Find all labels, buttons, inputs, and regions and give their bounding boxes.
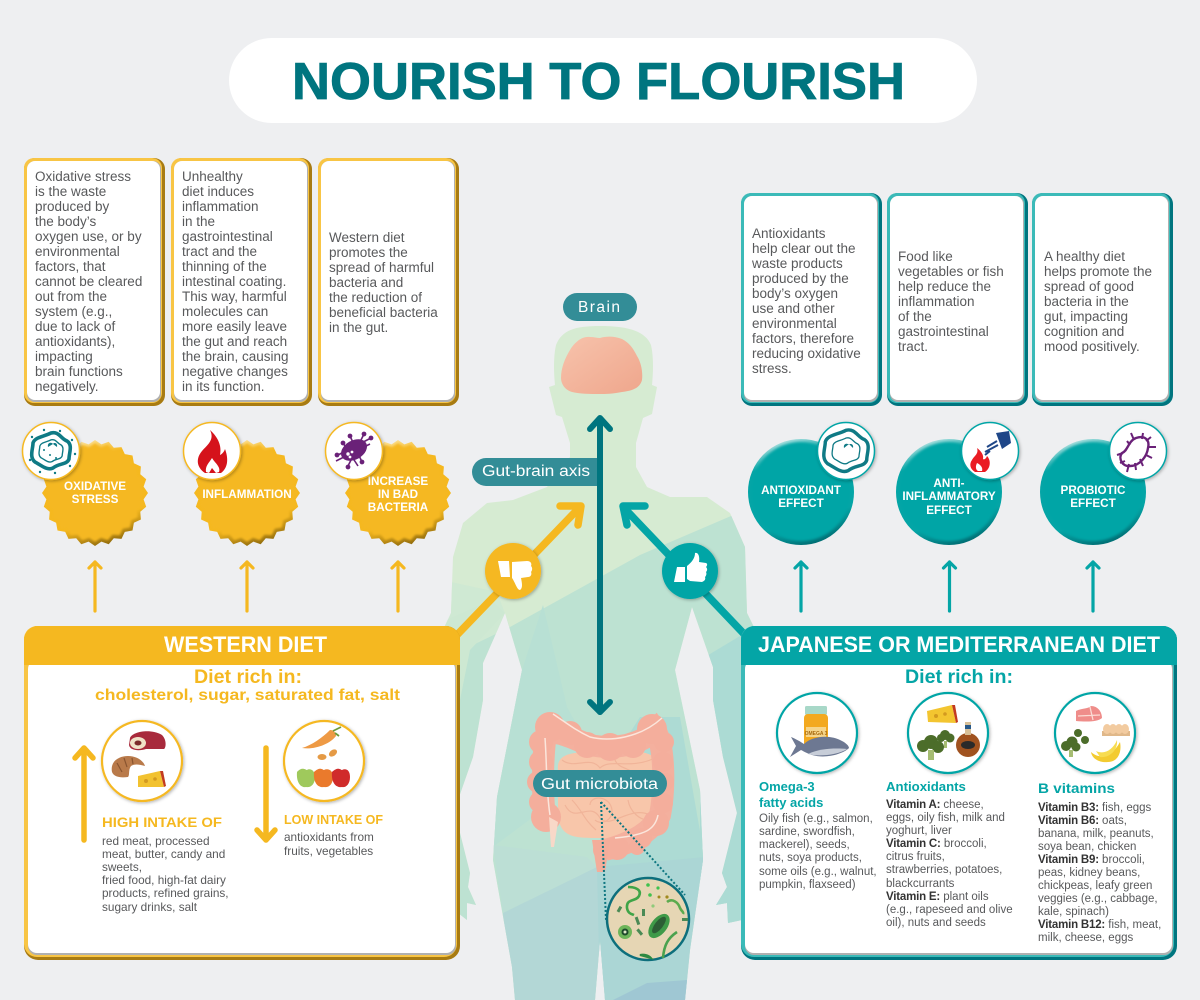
badge: increase in bad bacteria: INCREASE <box>368 475 428 488</box>
card: inflammation text: the gut and reach <box>182 334 287 349</box>
card: inflammation text: in the <box>182 214 215 229</box>
card: inflammation text: intestinal coating. <box>182 274 286 289</box>
column: antioxidants: Antioxidants <box>886 779 966 794</box>
column: antioxidants: cheese, <box>940 799 984 811</box>
card: probiotic text: helps promote the <box>1044 264 1152 279</box>
card: probiotic text: spread of good <box>1044 279 1134 294</box>
heading: japanese or mediterranean diet: JAPANESE OR MEDITERRANEAN DIET <box>758 632 1161 657</box>
subheading: diet rich in: cholesterol, sugar, saturated fat, salt <box>95 687 401 704</box>
subheading: diet rich in: Diet rich in: <box>905 667 1013 688</box>
brain <box>561 337 642 394</box>
column: antioxidants: broccoli, <box>941 838 987 850</box>
card: inflammation text: tract and the <box>182 244 257 259</box>
column: antioxidants: Vitamin C: <box>886 838 941 850</box>
column: antioxidants: blackcurrants <box>886 878 955 890</box>
column: B vitamins: fish, eggs <box>1099 802 1152 814</box>
label: Gut-brain axis: Gut-brain axis <box>482 463 590 480</box>
text: low intake: LOW INTAKE OF <box>284 813 383 827</box>
column: omega-3: Oily fish (e.g., salmon, <box>759 813 873 825</box>
badge: oxidative stress <box>22 422 148 546</box>
label: Gut-brain axis <box>472 458 600 486</box>
card: antioxidants text: produced by the <box>752 271 849 286</box>
column: B vitamins: kale, spinach) <box>1038 906 1109 918</box>
column: B vitamins: banana, milk, peanuts, <box>1038 828 1154 840</box>
column: B vitamins: soya bean, chicken <box>1038 841 1136 853</box>
badge: oxidative stress: OXIDATIVE <box>64 480 126 493</box>
icon: omega-3 <box>777 693 857 773</box>
column: B vitamins: broccoli, <box>1099 854 1145 866</box>
badge: increase in bad bacteria <box>326 422 451 546</box>
arrow: low intake <box>257 748 275 840</box>
badge: anti-inflammatory effect: ANTI- <box>933 477 965 490</box>
badge: anti-inflammatory effect <box>896 422 1018 545</box>
column: B vitamins: Vitamin B9: <box>1038 854 1099 866</box>
card: oxidative stress text: antioxidants), <box>35 334 115 349</box>
label: Gut microbiota: Gut microbiota <box>541 776 658 793</box>
card: anti-inflammatory text: tract. <box>898 339 928 354</box>
column: antioxidants: (e.g., rapeseed and olive <box>886 904 1013 916</box>
column: B vitamins: peas, kidney beans, <box>1038 867 1140 879</box>
panel: western diet <box>24 626 460 960</box>
card: inflammation text: This way, harmful <box>182 289 287 304</box>
card: oxidative stress text <box>24 158 165 406</box>
card: inflammation text: thinning of the <box>182 259 267 274</box>
badge: anti-inflammatory effect: INFLAMMATORY <box>902 490 996 503</box>
human body silhouette <box>445 326 754 1000</box>
card: oxidative stress text: impacting <box>35 349 93 364</box>
icon: water on flame <box>962 422 1018 480</box>
subheading: diet rich in <box>95 667 401 704</box>
column: antioxidants: plant oils <box>940 891 989 903</box>
text: low intake: fruits, vegetables <box>284 844 373 858</box>
card: anti-inflammatory text: Food like <box>898 249 953 264</box>
icon: high intake foods <box>102 721 182 801</box>
card: probiotic text: cognition and <box>1044 324 1124 339</box>
card: oxidative stress text: the body’s <box>35 214 97 229</box>
card: anti-inflammatory text <box>887 193 1028 406</box>
icon: flame <box>184 422 240 480</box>
card: probiotic text <box>1032 193 1173 406</box>
badge: anti-inflammatory effect: EFFECT <box>926 504 973 517</box>
card: anti-inflammatory text: inflammation <box>898 294 975 309</box>
card: antioxidants text: use and other <box>752 301 835 316</box>
subheading: diet rich in: Diet rich in: <box>194 667 302 688</box>
card: bad bacteria text <box>318 158 459 406</box>
badge: probiotic effect: PROBIOTIC <box>1061 484 1126 497</box>
card: bad bacteria text: beneficial bacteria <box>329 305 438 320</box>
text: high intake: red meat, processed <box>102 834 210 848</box>
column: antioxidants: oil), nuts and seeds <box>886 917 986 929</box>
column: omega-3: some oils (e.g., walnut, <box>759 866 877 878</box>
card: inflammation text: in its function. <box>182 379 265 394</box>
card: inflammation text: inflammation <box>182 199 259 214</box>
icon: bad bacterium <box>326 422 382 480</box>
card: bad bacteria text: bacteria and <box>329 275 403 290</box>
column: B vitamins: Vitamin B12: <box>1038 919 1105 931</box>
text: high intake: fried food, high-fat dairy <box>102 873 226 887</box>
column: B vitamins: oats, <box>1099 815 1127 827</box>
card: antioxidants text: reducing oxidative <box>752 346 861 361</box>
card: antioxidants text <box>741 193 882 406</box>
card: oxidative stress text: environmental <box>35 244 120 259</box>
column: omega-3: sardine, swordfish, <box>759 826 855 838</box>
badge: increase in bad bacteria: BACTERIA <box>368 501 429 514</box>
arrow: gut-brain axis (double headed) <box>590 418 610 712</box>
card: probiotic text: mood positively. <box>1044 339 1140 354</box>
title banner <box>229 38 977 123</box>
card: inflammation text: more easily leave <box>182 319 287 334</box>
heading: western diet: WESTERN DIET <box>164 632 328 657</box>
icon: B vitamin foods <box>1055 693 1135 773</box>
card: antioxidants text: body’s oxygen <box>752 286 838 301</box>
column: B vitamins: Vitamin B3: <box>1038 802 1099 814</box>
card: antioxidants text: factors, therefore <box>752 331 854 346</box>
card: anti-inflammatory text: vegetables or fish <box>898 264 1004 279</box>
column: antioxidants: citrus fruits, <box>886 851 945 863</box>
card: inflammation text: molecules can <box>182 304 268 319</box>
arrows: healthy diet to effects <box>795 562 1099 611</box>
card: inflammation text: diet induces <box>182 184 254 199</box>
card: antioxidants text: help clear out the <box>752 241 856 256</box>
icon: omega-3: OMEGA 3 <box>805 731 828 737</box>
icon: thumbs up <box>662 543 718 599</box>
column: B vitamins: milk, cheese, eggs <box>1038 932 1133 944</box>
column: omega-3: nuts, soya products, <box>759 852 862 864</box>
card: oxidative stress text: factors, that <box>35 259 106 274</box>
text: high intake <box>102 814 229 914</box>
label: Brain: Brain <box>578 299 620 316</box>
card: antioxidants text: stress. <box>752 361 792 376</box>
text: low intake: antioxidants from <box>284 830 374 844</box>
card: probiotic text: bacteria in the <box>1044 294 1129 309</box>
column: omega-3: Omega-3 <box>759 779 815 794</box>
text: high intake: HIGH INTAKE OF <box>102 814 222 830</box>
badge: antioxidant effect: EFFECT <box>778 497 825 510</box>
column: antioxidants: eggs, oily fish, milk and <box>886 812 1005 824</box>
arrows: western diet to effects <box>89 562 404 611</box>
column: antioxidants: yoghurt, liver <box>886 825 952 837</box>
card: bad bacteria text: promotes the <box>329 245 408 260</box>
column: B vitamins: chickpeas, leafy green <box>1038 880 1152 892</box>
column: B vitamins: veggies (e.g., cabbage, <box>1038 893 1158 905</box>
card: anti-inflammatory text: help reduce the <box>898 279 991 294</box>
column: B vitamins: fish, meat, <box>1105 919 1161 931</box>
icon: healthy cell <box>818 422 874 480</box>
column: antioxidants <box>886 779 1013 929</box>
text: high intake: sweets, <box>102 860 142 874</box>
intestines <box>527 712 674 872</box>
column: B vitamins: B vitamins <box>1038 780 1115 796</box>
badge: probiotic effect: EFFECT <box>1070 497 1117 510</box>
card: oxidative stress text: Oxidative stress <box>35 169 131 184</box>
card: anti-inflammatory text: gastrointestinal <box>898 324 989 339</box>
panel: japanese or mediterranean diet <box>741 626 1177 960</box>
badge: increase in bad bacteria: IN BAD <box>378 488 418 501</box>
badge: antioxidant effect <box>748 422 874 545</box>
card: oxidative stress text: produced by <box>35 199 110 214</box>
card: bad bacteria text: in the gut. <box>329 320 388 335</box>
card: oxidative stress text: due to lack of <box>35 319 116 334</box>
arrow: healthy diet to gut-brain axis <box>623 506 745 635</box>
card: bad bacteria text: the reduction of <box>329 290 422 305</box>
icon: antioxidant foods <box>908 693 988 773</box>
text: low intake <box>284 813 383 858</box>
title banner: NOURISH TO FLOURISH <box>292 53 905 111</box>
card: bad bacteria text: spread of harmful <box>329 260 434 275</box>
column: B vitamins: Vitamin B6: <box>1038 815 1099 827</box>
card: oxidative stress text: is the waste <box>35 184 106 199</box>
card: antioxidants text: environmental <box>752 316 837 331</box>
text: high intake: products, refined grains, <box>102 886 229 900</box>
card: oxidative stress text: negatively. <box>35 379 99 394</box>
badge: oxidative stress: STRESS <box>72 493 119 506</box>
arrow: high intake <box>75 748 93 840</box>
card: probiotic text: A healthy diet <box>1044 249 1125 264</box>
column: antioxidants: Vitamin E: <box>886 891 940 903</box>
icon: low intake foods <box>284 721 364 801</box>
text: high intake: sugary drinks, salt <box>102 900 198 914</box>
card: oxidative stress text: system (e.g., <box>35 304 112 319</box>
label: Brain <box>563 293 637 321</box>
card: antioxidants text: Antioxidants <box>752 226 826 241</box>
card: oxidative stress text: out from the <box>35 289 107 304</box>
column: omega-3: pumpkin, flaxseed) <box>759 879 856 891</box>
card: oxidative stress text: cannot be cleared <box>35 274 142 289</box>
card: oxidative stress text: oxygen use, or by <box>35 229 142 244</box>
column: omega-3: mackerel), seeds, <box>759 839 850 851</box>
card: inflammation text: the brain, causing <box>182 349 289 364</box>
icon: oxidative cell <box>22 422 80 480</box>
card: anti-inflammatory text: of the <box>898 309 932 324</box>
card: inflammation text: Unhealthy <box>182 169 243 184</box>
badge: inflammation <box>184 422 300 546</box>
card: bad bacteria text: Western diet <box>329 230 405 245</box>
column: omega-3 <box>759 779 877 891</box>
column: antioxidants: Vitamin A: <box>886 799 940 811</box>
badge: probiotic effect <box>1040 422 1166 545</box>
icon: thumbs down <box>485 543 541 599</box>
card: inflammation text: gastrointestinal <box>182 229 273 244</box>
card: antioxidants text: waste products <box>751 256 843 271</box>
column: omega-3: fatty acids <box>759 795 823 810</box>
column: antioxidants: strawberries, potatoes, <box>886 864 1002 876</box>
card: oxidative stress text: brain functions <box>35 364 123 379</box>
badge: inflammation: INFLAMMATION <box>202 488 292 501</box>
column: B vitamins <box>1038 780 1161 944</box>
card: probiotic text: gut, impacting <box>1044 309 1128 324</box>
card: inflammation text: negative changes <box>182 364 288 379</box>
microbiota magnifier <box>601 802 689 960</box>
icon: good bacterium <box>1110 422 1166 480</box>
arrow: western diet to gut-brain axis <box>455 506 581 637</box>
label: Gut microbiota <box>533 770 667 797</box>
badge: antioxidant effect: ANTIOXIDANT <box>761 484 842 497</box>
text: high intake: meat, butter, candy and <box>102 847 225 861</box>
card: inflammation text <box>171 158 312 406</box>
